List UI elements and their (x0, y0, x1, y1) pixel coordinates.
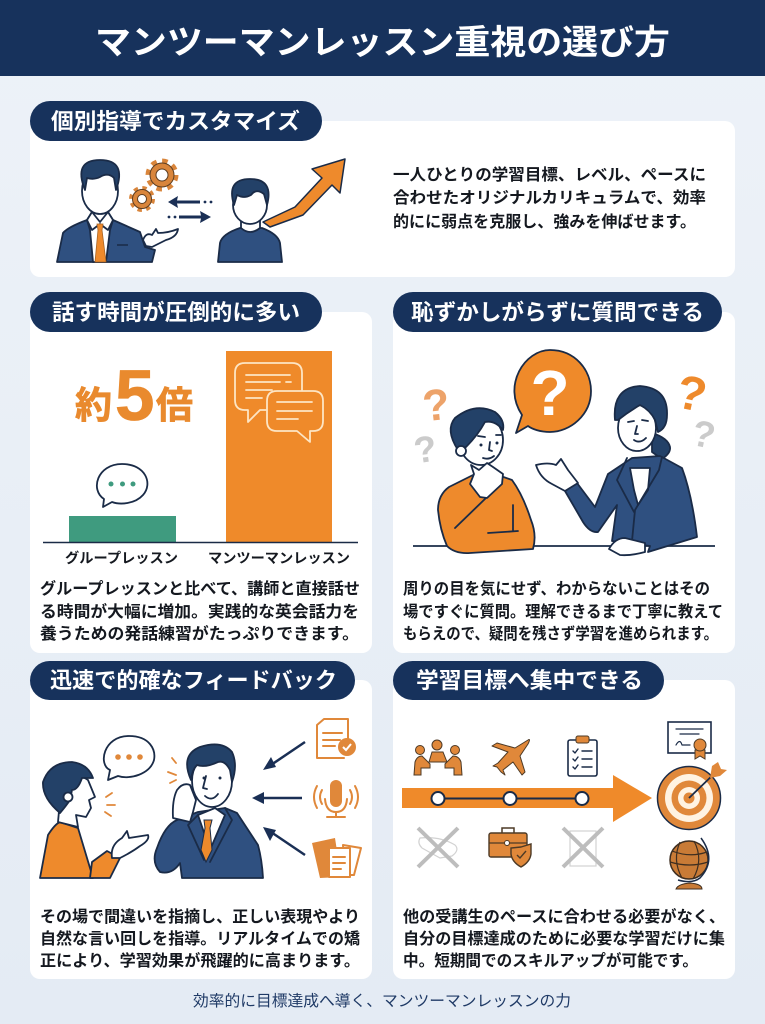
bar: group lesson (69, 516, 176, 542)
icon: document with check (317, 719, 356, 758)
heading: individual customization: 個別指導でカスタマイズ (51, 109, 300, 134)
icon: growth arrow (263, 159, 345, 227)
text: customization (393, 165, 706, 231)
icon: question speech bubble (514, 350, 591, 433)
text: speaking time: る時間が大幅に増加。実践的な英会話力を (40, 602, 359, 621)
text: customization: 合わせたオリジナルカリキュラムで、効率 (393, 189, 706, 207)
icon: speech bubble (104, 736, 154, 780)
illustration: student speaking (40, 762, 148, 878)
labels: bar names: グループレッスン (65, 550, 178, 566)
icons: question marks (411, 365, 719, 471)
callout: about 5 times: 倍 (156, 385, 193, 426)
callout: about 5 times: 5 (115, 357, 154, 436)
icons: question marks: ? (420, 380, 452, 431)
icon: meeting people (414, 740, 462, 775)
callout: about 5 times: 約 (75, 385, 112, 426)
heading: ask questions (393, 292, 722, 332)
text: goal focus: 他の受講生のペースに合わせる必要がなく、 (403, 907, 725, 926)
heading: speaking time: 話す時間が圧倒的に多い (52, 300, 300, 325)
heading: ask questions: 恥ずかしがらずに質問できる (411, 300, 704, 325)
arrows: feedback inputs (252, 742, 305, 855)
illustration: woman teacher (536, 386, 697, 555)
panel: individual customization (30, 101, 735, 277)
icon: target with dart (658, 762, 727, 830)
icon: checklist clipboard (568, 736, 597, 776)
bar: one-on-one lesson (226, 351, 332, 542)
text: speaking time (40, 579, 360, 643)
text: speaking time: 養うための発話練習がたっぷりできます。 (40, 624, 359, 643)
text: ask questions (403, 579, 723, 643)
icons: question marks: ? (672, 365, 711, 423)
callout: about 5 times (75, 357, 193, 436)
icon: small speech bubble (97, 464, 147, 507)
icon: exchange arrows (168, 196, 212, 223)
heading: quick feedback: 迅速で的確なフィードバック (50, 668, 337, 693)
icon: large speech bubbles (235, 363, 323, 442)
icon: crossed-out scroll (418, 828, 458, 867)
panel: quick feedback (30, 661, 372, 979)
panel: speaking time (30, 292, 372, 653)
text: ask questions: 場ですぐに質問。理解できるまで丁寧に教えて (403, 602, 723, 621)
heading: goal focus (393, 661, 664, 700)
text: speaking time: グループレッスンと比べて、講師と直接話せ (40, 579, 360, 598)
title banner (0, 0, 765, 76)
illustration: thinking student (438, 408, 535, 553)
arrow: learning path (402, 775, 652, 822)
icon: briefcase with shield (489, 828, 531, 867)
icon: student (218, 179, 282, 262)
text: quick feedback: その場で間違いを指摘し、正しい表現やより (40, 907, 360, 926)
text: customization: 一人ひとりの学習目標、レベル、ペースに (393, 165, 706, 184)
icon: question speech bubble: ? (530, 357, 570, 429)
bar chart: speaking time comparison (43, 351, 358, 566)
labels: bar names: マンツーマンレッスン (208, 550, 350, 566)
text: goal focus: 中。短期間でのスキルアップが可能です。 (403, 951, 698, 970)
text: quick feedback (40, 907, 360, 970)
text: ask questions: 周りの目を気にせず、わからないことはその (403, 579, 710, 598)
icon: airplane (492, 740, 530, 775)
heading: goal focus: 学習目標へ集中できる (416, 668, 643, 693)
panel: ask questions (393, 292, 735, 653)
heading: speaking time (30, 292, 322, 332)
icon: gears (131, 161, 176, 210)
labels: bar names (65, 550, 350, 566)
icon: cards (312, 838, 361, 878)
heading: individual customization (30, 101, 322, 141)
text: ask questions: もらえので、疑問を残さず学習を進められます。 (403, 624, 718, 643)
heading: quick feedback (30, 661, 355, 700)
text: goal focus: 自分の目標達成のために必要な学習だけに集 (403, 929, 725, 948)
text: quick feedback: 自然な言い回しを指導。リアルタイムでの矯 (40, 929, 360, 948)
icon: crossed-out document (563, 828, 603, 867)
text: quick feedback: 正により、学習効果が飛躍的に高まります。 (40, 951, 360, 970)
icons: question marks: ? (411, 428, 439, 471)
illustration: teacher listening (155, 744, 263, 878)
icon: certificate (668, 722, 711, 759)
icon: microphone (314, 780, 358, 817)
icon: teacher in suit (57, 160, 178, 262)
text: goal focus (403, 907, 725, 970)
title banner: マンツーマンレッスン重視の選び方 (95, 24, 670, 62)
icons: question marks: ? (688, 412, 719, 457)
icon: globe (670, 838, 709, 889)
panel: goal focus (393, 661, 735, 979)
footer caption: 効率的に目標達成へ導く、マンツーマンレッスンの力 (193, 992, 571, 1010)
text: customization: 的にに弱点を克服し、強みを伸ばせます。 (393, 212, 696, 231)
